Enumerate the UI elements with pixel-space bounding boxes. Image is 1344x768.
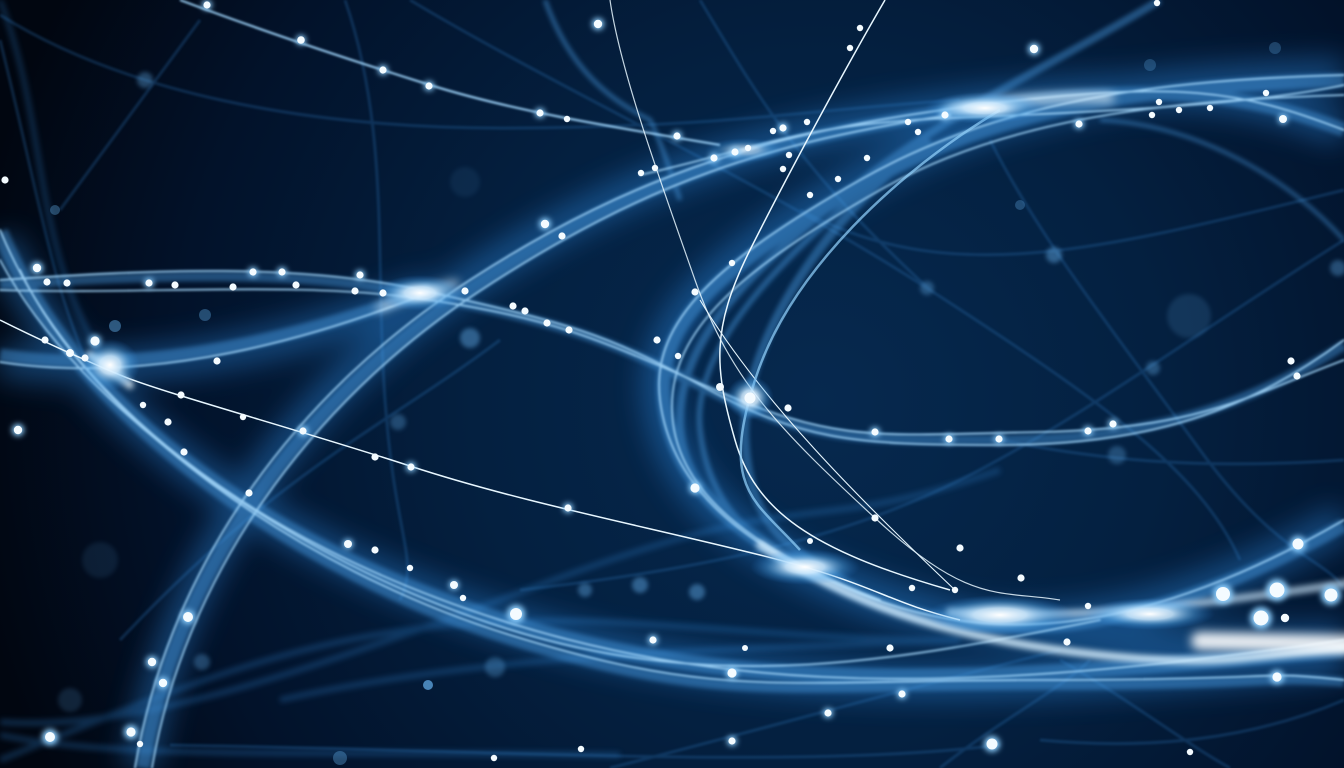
dim lower ribbons xyxy=(0,0,1000,760)
bright flares xyxy=(80,92,1215,635)
thin white filaments xyxy=(0,0,1060,620)
bright lower-right band xyxy=(90,98,1344,660)
